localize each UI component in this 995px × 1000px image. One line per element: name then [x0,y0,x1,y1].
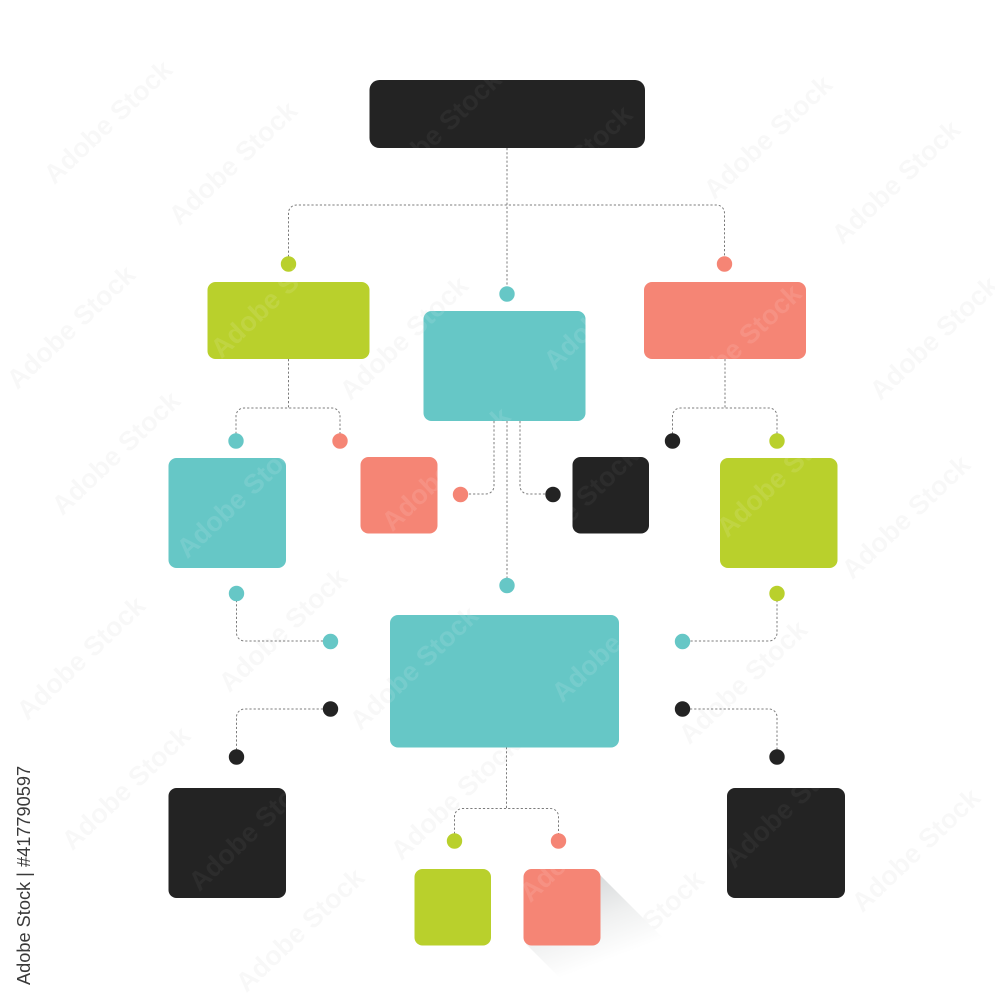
faint watermark on background: Adobe Stock [56,720,197,856]
box: coral level two [644,282,806,359]
faint watermark on background: Adobe Stock [213,562,354,698]
box: teal centre [424,311,586,421]
box: coral bottom [524,869,600,946]
connector: centre teal box outputs [468,421,546,578]
faint watermark on background: Adobe Stock [570,864,711,1000]
box: top black title [370,80,645,148]
faint watermark on background: Adobe Stock [163,95,304,231]
faint watermark on background: Adobe Stock [698,69,839,205]
watermark over boxes: Adobe Stock [546,572,687,708]
stock id vertical text: Adobe Stock | #417790597 [14,766,34,985]
watermark over boxes: Adobe Stock [334,270,475,406]
faint watermark on background: Adobe Stock [344,600,485,736]
box: teal left [168,458,286,568]
box: green bottom [414,869,491,946]
connector: right side to large teal box [690,600,777,750]
faint watermark on background: Adobe Stock [46,385,187,521]
watermark over boxes: Adobe Stock [718,738,859,874]
connector: left side to large teal box [236,600,323,750]
watermark over boxes: Adobe Stock [171,428,312,564]
box: large teal [390,615,619,748]
faint watermark on background: Adobe Stock [1,259,142,395]
watermark over boxes: Adobe Stock [367,64,508,200]
faint watermark on background: Adobe Stock [846,782,987,918]
faint watermark on background: Adobe Stock [673,614,814,750]
faint watermark on background: Adobe Stock [334,270,475,406]
faint watermark on background: Adobe Stock [836,449,977,585]
connector dots [228,256,785,849]
box: coral small [360,457,438,534]
watermark over boxes: Adobe Stock [711,407,852,543]
watermark over boxes: Adobe Stock [344,600,485,736]
watermark over boxes: Adobe Stock [376,401,517,537]
box: black small [572,457,649,534]
faint watermark on background: Adobe Stock [385,730,526,866]
box: green level two [208,282,370,359]
watermark over boxes: Adobe Stock [205,228,346,364]
connector: coral box branch [672,359,777,434]
watermark over boxes: Adobe Stock [504,440,645,576]
watermark over boxes: Adobe Stock [183,761,324,897]
watermark over boxes: Adobe Stock [514,772,655,908]
box: black bottom left [168,788,286,898]
watermark over boxes [171,64,859,908]
faint watermark on background: Adobe Stock [826,114,967,250]
faint watermark on background: Adobe Stock [38,54,179,190]
faint watermark on background: Adobe Stock [230,862,371,998]
connector: green box branch [236,359,340,434]
connector: top box to second level [288,148,724,287]
watermark over boxes: Adobe Stock [667,278,808,414]
connector: large teal box to bottom boxes [454,747,558,834]
box: black bottom right [727,788,845,898]
watermark over boxes: Adobe Stock [538,240,679,376]
watermark over boxes: Adobe Stock [498,99,639,235]
faint watermark on background: Adobe Stock [11,590,152,726]
box: green right [720,458,838,568]
long shadow of bottom coral box [526,875,662,998]
